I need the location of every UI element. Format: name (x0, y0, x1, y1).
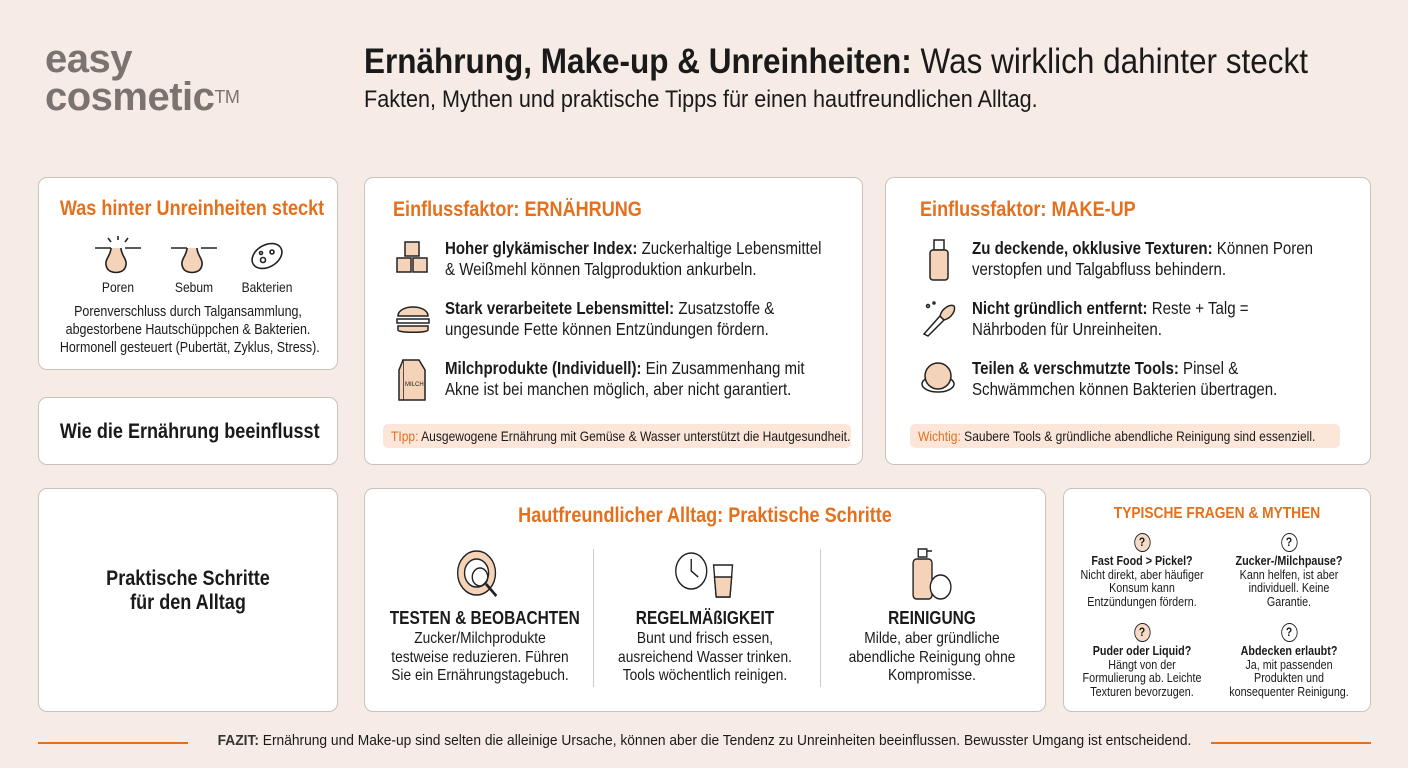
step: regularity (618, 552, 792, 684)
icon: foundation bottle (929, 239, 949, 281)
subtitle: Fakten, Mythen und praktische Tipps für einen hautfreundlichen Alltag. (364, 86, 1038, 113)
q4: Abdecken erlaubt? (1241, 644, 1337, 658)
q4: Ja, mit passenden (1245, 658, 1333, 672)
item: not removed (922, 298, 1249, 339)
logo (45, 37, 239, 119)
text: Porenverschluss durch Talgansammlung, (74, 304, 302, 320)
q1: Entzündungen fördern. (1087, 594, 1197, 608)
item: not removed: Nicht gründlich entfernt: Reste + Talg = (972, 298, 1249, 318)
item: dairy: Akne ist bei manchen möglich, aber nicht garantiert. (445, 379, 791, 399)
text: Hormonell gesteuert (Pubertät, Zyklus, Stress). (60, 340, 320, 356)
item: not removed: Nährboden für Unreinheiten. (972, 319, 1162, 339)
tip (910, 424, 1340, 448)
step: test: Zucker/Milchprodukte (414, 630, 546, 647)
icons: poren sebum bakterien: Bakterien (242, 279, 292, 295)
heading: Wie die Ernährung beeinflusst (60, 420, 320, 443)
panel: diet label (38, 397, 338, 465)
item: dairy: Milchprodukte (Individuell): Ein Zusammenhang mit (445, 358, 805, 378)
icon: clock and glass (675, 552, 734, 598)
q3: Texturen bevorzugen. (1090, 684, 1194, 698)
icon: milk carton: MILCH (405, 382, 424, 388)
q4: Produkten und (1254, 671, 1324, 685)
panel: myths (1063, 488, 1371, 712)
tip: TIpp: Ausgewogene Ernährung mit Gemüse & Wasser unterstützt die Hautgesundheit. (391, 428, 850, 444)
item: dairy (398, 358, 805, 401)
panel: steps label (38, 488, 338, 712)
q1: Nicht direkt, aber häufiger (1080, 568, 1204, 582)
step: cleansing (849, 548, 1015, 684)
q3: Hängt von der (1108, 658, 1176, 672)
step: test: testweise reduzieren. Führen (391, 648, 569, 666)
step: regularity: REGELMÄßIGKEIT (636, 608, 774, 628)
icon: soap dispenser (912, 548, 952, 600)
q2: Kann helfen, ist aber (1240, 568, 1338, 582)
icon: sugar cubes (396, 241, 428, 273)
q2: Zucker-/Milchpause? (1236, 554, 1342, 568)
q1 (1080, 533, 1204, 608)
icon: brush (922, 301, 956, 337)
q1: Fast Food > Pickel? (1091, 554, 1193, 568)
step: regularity: Tools wöchentlich reinigen. (623, 667, 787, 684)
item: textures (929, 238, 1313, 281)
heading: Praktische Schritte (106, 567, 270, 590)
item: processed food (396, 298, 774, 339)
icons: poren sebum bakterien (95, 236, 292, 295)
item: sharing tools: Schwämmchen können Bakterien übertragen. (972, 379, 1277, 399)
q2 (1236, 533, 1342, 608)
icon: burger (396, 306, 430, 333)
logo: cosmeticTM (45, 75, 239, 119)
tip: Wichtig: Saubere Tools & gründliche abendliche Reinigung sind essenziell. (918, 428, 1315, 444)
heading: Einflussfaktor: MAKE-UP (920, 198, 1136, 221)
item: GI (396, 238, 821, 279)
heading: Was hinter Unreinheiten steckt (60, 197, 324, 220)
panel: daily steps (364, 488, 1046, 712)
text (60, 304, 320, 356)
heading: Hautfreundlicher Alltag: Praktische Schritte (518, 504, 892, 527)
footer conclusion: FAZIT: Ernährung und Make-up sind selten die alleinige Ursache, können aber die Tendenz zu Unreinheiten beeinflussen. Bewusster Umgang ist entscheidend. (218, 733, 1191, 749)
icon: plate magnifier (456, 550, 498, 597)
q1: Konsum kann (1109, 581, 1175, 595)
step: test (390, 550, 580, 684)
step: test: Sie ein Ernährungstagebuch. (391, 667, 569, 684)
icon: milk carton (398, 359, 426, 401)
item: GI: Hoher glykämischer Index: Zuckerhaltige Lebensmittel (445, 238, 821, 258)
panel: makeup (885, 177, 1371, 465)
item: textures: Zu deckende, okklusive Texturen: Können Poren (972, 238, 1313, 258)
icon: compact (921, 362, 955, 393)
q3: Formulierung ab. Leichte (1083, 671, 1201, 685)
logo: easy (45, 37, 132, 81)
icons: poren sebum bakterien: Sebum (175, 279, 213, 295)
item: textures: verstopfen und Talgabfluss behindern. (972, 259, 1226, 279)
q2: Garantie. (1267, 594, 1311, 608)
q4: ? (1286, 625, 1292, 639)
item: GI: & Weißmehl können Talgproduktion ankurbeln. (445, 259, 757, 279)
tip (383, 424, 851, 448)
q1: ? (1139, 535, 1145, 549)
q2: ? (1286, 535, 1292, 549)
step: regularity: Bunt und frisch essen, (637, 630, 773, 647)
q3: ? (1139, 625, 1145, 639)
title: Ernährung, Make-up & Unreinheiten: Was wirklich dahinter steckt (364, 42, 1308, 81)
item: processed food: Stark verarbeitete Lebensmittel: Zusatzstoffe & (445, 298, 774, 318)
q4 (1229, 623, 1349, 698)
step: test: TESTEN & BEOBACHTEN (390, 608, 580, 628)
step: cleansing: Milde, aber gründliche (864, 630, 1000, 647)
q3: Puder oder Liquid? (1093, 644, 1191, 658)
q4: konsequenter Reinigung. (1229, 684, 1349, 698)
step: regularity: ausreichend Wasser trinken. (618, 648, 792, 666)
item: processed food: ungesunde Fette können Entzündungen fördern. (445, 319, 769, 339)
heading: Einflussfaktor: ERNÄHRUNG (393, 198, 642, 221)
q2: individuell. Keine (1249, 581, 1329, 595)
panel: nutrition (364, 177, 863, 465)
item: sharing tools (921, 358, 1277, 399)
panel: causes (38, 177, 338, 370)
step: cleansing: abendliche Reinigung ohne (849, 648, 1015, 666)
q3 (1083, 623, 1201, 698)
heading: für den Alltag (130, 591, 246, 614)
item: sharing tools: Teilen & verschmutzte Tools: Pinsel & (972, 358, 1238, 378)
heading: TYPISCHE FRAGEN & MYTHEN (1114, 505, 1320, 522)
icons: poren sebum bakterien: Poren (102, 279, 134, 295)
text: abgestorbene Hautschüppchen & Bakterien. (66, 322, 310, 338)
step: cleansing: Kompromisse. (888, 667, 976, 684)
heading (106, 567, 270, 614)
step: cleansing: REINIGUNG (888, 608, 976, 628)
